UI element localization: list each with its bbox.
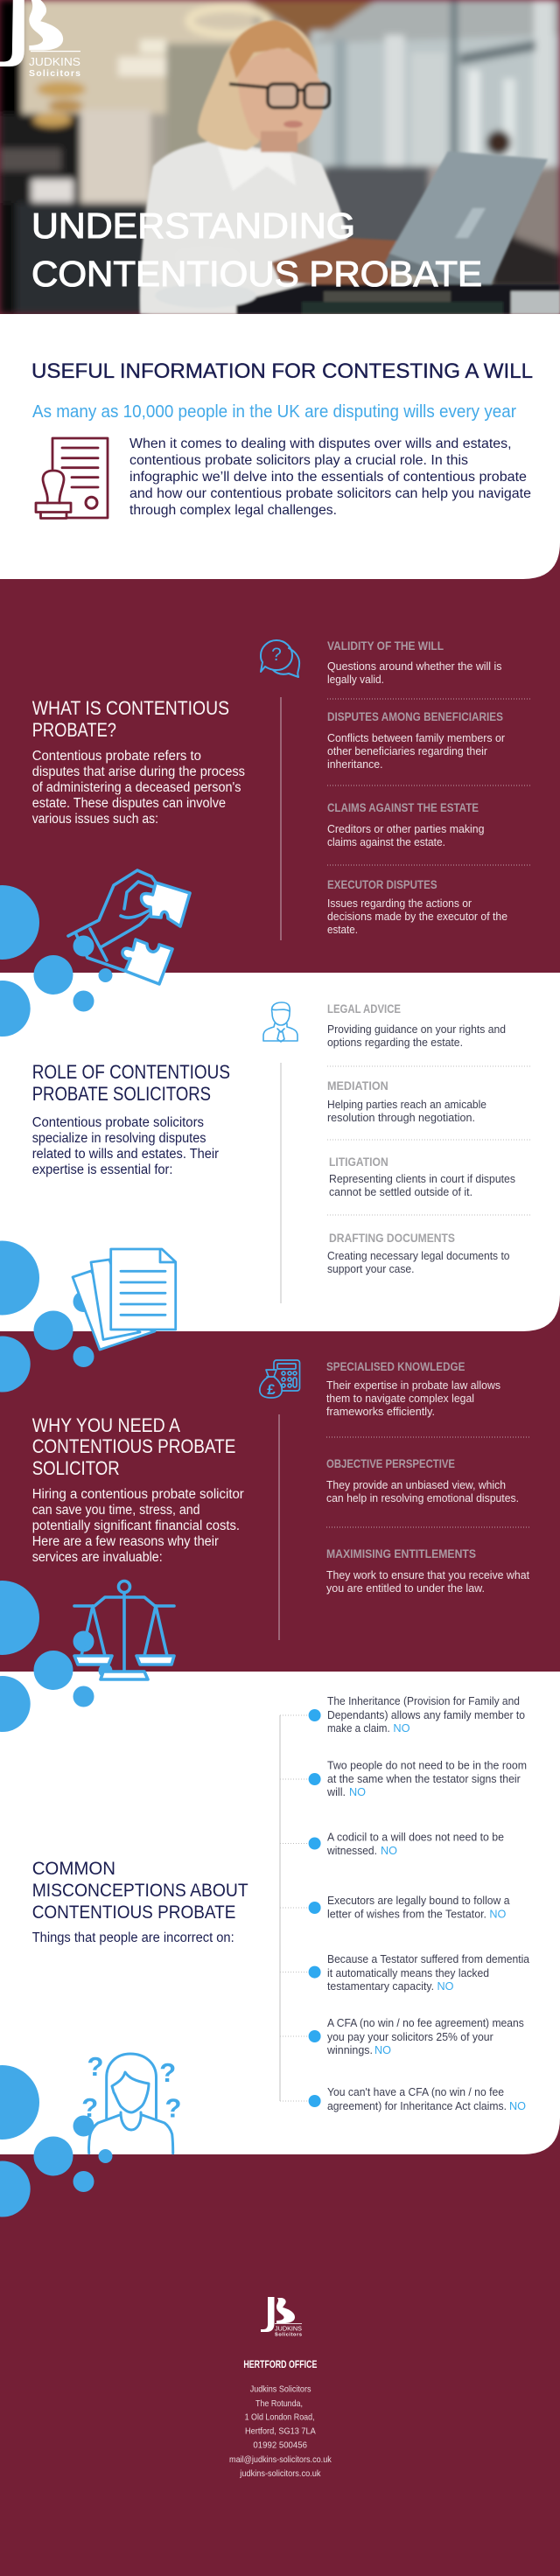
- item: validity of the will: VALIDITY OF THE WILL: [327, 639, 444, 653]
- misconception 6: you pay your solicitors 25% of your: [327, 2030, 494, 2043]
- item: objective perspective: can help in resolving emotional disputes.: [326, 1491, 519, 1504]
- title: [33, 213, 481, 287]
- office address: Judkins Solicitors: [250, 2384, 312, 2395]
- item: specialised knowledge: frameworks efficiently.: [326, 1405, 435, 1418]
- misconception 6: [280, 2016, 524, 2056]
- misconception 5: it automatically means they lacked: [327, 1966, 489, 1979]
- panel: footer office details: [229, 2297, 332, 2479]
- item: drafting documents: Creating necessary legal documents to: [327, 1249, 509, 1262]
- item: executor disputes: [327, 878, 508, 936]
- misconception 4: NO: [489, 1907, 506, 1921]
- misconception 1: NO: [393, 1721, 410, 1735]
- item: legal advice: options regarding the estate.: [327, 1036, 463, 1049]
- item: maximising entitlements: They work to ensure that you receive what: [326, 1568, 529, 1581]
- item: disputes among beneficiaries: Conflicts between family members or: [327, 731, 506, 744]
- heading: PROBATE?: [32, 719, 116, 741]
- item: claims against the estate: claims against the estate.: [327, 835, 445, 848]
- item: legal advice: Providing guidance on your rights and: [327, 1023, 506, 1036]
- misconception 3: [280, 1831, 504, 1857]
- panel: why you need a contentious probate solicitor: [32, 1360, 531, 1640]
- item: claims against the estate: Creditors or other parties making: [327, 822, 485, 835]
- misconception 7: [280, 2085, 526, 2112]
- icon: confused woman with question marks: ?: [159, 2057, 176, 2088]
- heading: [32, 697, 229, 741]
- decorative circles: third section boundary: [0, 1581, 112, 1732]
- heading: CONTENTIOUS PROBATE: [32, 1435, 235, 1457]
- misconception 1: make a claim.: [327, 1721, 390, 1735]
- intro paragraph: through complex legal challenges.: [130, 503, 337, 518]
- item: disputes among beneficiaries: [327, 710, 506, 771]
- item: claims against the estate: CLAIMS AGAINST THE ESTATE: [327, 801, 479, 814]
- item: specialised knowledge: Their expertise in probate law allows: [326, 1379, 500, 1392]
- heading: useful information: USEFUL INFORMATION FOR CONTESTING A WILL: [32, 360, 533, 383]
- description paragraph: disputes that arise during the process: [32, 764, 245, 779]
- panel: common misconceptions: [0, 1672, 560, 2154]
- icon: question speech bubbles: [261, 640, 299, 677]
- title: CONTENTIOUS PROBATE: [32, 254, 482, 294]
- misconception 5: [280, 1952, 530, 1993]
- icon: will document and stamp: [36, 438, 108, 518]
- office address: [229, 2384, 332, 2479]
- office address: mail@judkins-solicitors.co.uk: [229, 2454, 332, 2465]
- item: validity of the will: [327, 639, 502, 686]
- intro paragraph: infographic we’ll delve into the essentials of contentious probate: [130, 470, 527, 485]
- item: executor disputes: Issues regarding the actions or: [327, 897, 472, 910]
- item: litigation: cannot be settled outside of it.: [329, 1185, 472, 1198]
- description paragraph: of administering a deceased person's: [32, 780, 242, 795]
- icon: question speech bubbles: ?: [271, 645, 282, 665]
- description paragraph: various issues such as:: [32, 812, 158, 827]
- misconception 5: testamentary capacity.: [327, 1979, 434, 1993]
- heading: SOLICITOR: [32, 1457, 120, 1479]
- description paragraph: Contentious probate solicitors: [32, 1115, 204, 1130]
- heading: COMMON: [32, 1858, 116, 1879]
- item: disputes among beneficiaries: other beneficiaries regarding their: [327, 744, 488, 757]
- item: mediation: resolution through negotiation.: [327, 1111, 475, 1124]
- misconception 6: NO: [374, 2043, 391, 2056]
- item: litigation: Representing clients in court if disputes: [329, 1172, 515, 1185]
- title: UNDERSTANDING: [32, 206, 355, 246]
- misconception 6: winnings.: [326, 2043, 373, 2056]
- misconception 2: NO: [349, 1785, 366, 1798]
- heading: [32, 1858, 248, 1923]
- panel: introduction: [0, 314, 560, 579]
- item: maximising entitlements: you are entitled to under the law.: [326, 1581, 485, 1595]
- description line: Things that people are incorrect on:: [32, 1930, 234, 1945]
- description paragraph: related to wills and estates. Their: [32, 1147, 219, 1162]
- item: objective perspective: OBJECTIVE PERSPECTIVE: [326, 1457, 455, 1470]
- misconception 2: Two people do not need to be in the room: [327, 1758, 527, 1772]
- description paragraph: can save you time, stress, and: [32, 1503, 200, 1518]
- item: mediation: [327, 1079, 486, 1124]
- misconception 2: at the same when the testator signs their: [327, 1772, 521, 1785]
- intro paragraph: contentious probate solicitors play a crucial role. In this: [130, 453, 468, 468]
- misconception 4: [280, 1894, 510, 1921]
- misconception 3: NO: [381, 1844, 397, 1857]
- description paragraph: specialize in resolving disputes: [32, 1131, 206, 1146]
- logo: footer Judkins Solicitors: JUDKINS: [275, 2324, 302, 2332]
- misconception 4: Executors are legally bound to follow a: [327, 1894, 510, 1907]
- panel: role of contentious probate solicitors: [0, 973, 560, 1331]
- item: specialised knowledge: SPECIALISED KNOWLEDGE: [326, 1360, 465, 1373]
- icon: confused woman with question marks: ?: [165, 2093, 181, 2124]
- item: executor disputes: estate.: [327, 923, 358, 936]
- misconception 3: A codicil to a will does not need to be: [327, 1831, 504, 1844]
- hero photo: woman at laptop: [140, 20, 560, 314]
- icon: solicitor person: [263, 1002, 298, 1042]
- intro paragraph: and how our contentious probate solicitors can help you navigate: [130, 486, 531, 501]
- item: litigation: [329, 1155, 515, 1198]
- item: drafting documents: [327, 1232, 509, 1275]
- icon: confused woman with question marks: ?: [88, 2051, 103, 2082]
- item: legal advice: LEGAL ADVICE: [327, 1002, 401, 1016]
- icon: confused woman with question marks: [81, 2051, 181, 2154]
- description paragraph: services are invaluable:: [32, 1550, 163, 1565]
- office address: judkins-solicitors.co.uk: [239, 2468, 321, 2479]
- icon: calculator and money bag: [260, 1360, 299, 1398]
- icon: calculator and money bag: £: [267, 1381, 276, 1398]
- misconception 3: witnessed.: [326, 1844, 377, 1857]
- description paragraph: Hiring a contentious probate solicitor: [32, 1487, 244, 1502]
- item: executor disputes: decisions made by the executor of the: [327, 910, 508, 923]
- office address: 01992 500456: [253, 2440, 307, 2451]
- item: objective perspective: [326, 1457, 519, 1504]
- item: maximising entitlements: [326, 1547, 529, 1595]
- misconception 7: You can't have a CFA (no win / no fee: [327, 2085, 504, 2098]
- panel: hero photo banner: [0, 0, 560, 314]
- misconception 5: NO: [438, 1979, 453, 1993]
- misconception 4: letter of wishes from the Testator.: [327, 1907, 486, 1921]
- intro paragraph: [130, 436, 531, 518]
- misconception 2: [280, 1758, 527, 1798]
- item: executor disputes: EXECUTOR DISPUTES: [327, 878, 438, 891]
- item: validity of the will: Questions around whether the will is: [327, 660, 502, 673]
- heading: CONTENTIOUS PROBATE: [32, 1902, 235, 1923]
- description paragraph: estate. These disputes can involve: [32, 796, 226, 811]
- item: validity of the will: legally valid.: [327, 673, 384, 686]
- heading: [32, 1414, 235, 1479]
- intro paragraph: When it comes to dealing with disputes over wills and estates,: [130, 436, 511, 451]
- item: objective perspective: They provide an unbiased view, which: [326, 1478, 506, 1491]
- heading: MISCONCEPTIONS ABOUT: [32, 1880, 248, 1901]
- misconception 7: agreement) for Inheritance Act claims.: [327, 2099, 507, 2112]
- item: claims against the estate: [327, 801, 485, 848]
- item: drafting documents: DRAFTING DOCUMENTS: [329, 1232, 455, 1245]
- decorative circles: first section boundary: [0, 885, 112, 1037]
- description paragraph: expertise is essential for:: [32, 1162, 173, 1177]
- statistic subheading: As many as 10,000 people in the UK are disputing wills every year: [32, 401, 516, 422]
- item: maximising entitlements: MAXIMISING ENTITLEMENTS: [326, 1547, 476, 1560]
- office address: The Rotunda,: [256, 2398, 303, 2409]
- item: drafting documents: support your case.: [327, 1262, 415, 1275]
- misconception 1: Dependants) allows any family member to: [327, 1708, 525, 1721]
- misconception 5: Because a Testator suffered from dementia: [327, 1952, 530, 1965]
- misconception 2: will.: [326, 1785, 346, 1798]
- heading: WHAT IS CONTENTIOUS: [32, 697, 229, 719]
- item: disputes among beneficiaries: DISPUTES AMONG BENEFICIARIES: [327, 710, 503, 723]
- description paragraph: Here are a few reasons why their: [32, 1534, 219, 1549]
- item: legal advice: [327, 1002, 506, 1049]
- heading: [32, 1061, 230, 1105]
- heading: ROLE OF CONTENTIOUS: [32, 1061, 230, 1083]
- description paragraph: [32, 1115, 219, 1177]
- panel: what is contentious probate: [32, 639, 531, 940]
- misconception 1: [280, 1694, 525, 1735]
- description paragraph: [32, 749, 245, 827]
- logo: Judkins Solicitors: JUDKINS: [29, 55, 80, 68]
- heading: PROBATE SOLICITORS: [32, 1083, 211, 1105]
- logo: footer Judkins Solicitors: [261, 2297, 302, 2338]
- logo: Judkins Solicitors: Solicitors: [29, 68, 80, 79]
- description paragraph: [32, 1487, 244, 1565]
- item: mediation: MEDIATION: [327, 1079, 388, 1093]
- item: specialised knowledge: [326, 1360, 500, 1418]
- decorative circles: second section boundary: [0, 1240, 112, 1393]
- office address: Hertford, SG13 7LA: [245, 2426, 316, 2437]
- decorative circles: fourth section boundary: [0, 2065, 112, 2216]
- icon: confused woman with question marks: ?: [81, 2092, 98, 2123]
- icon: stack of documents: [73, 1249, 176, 1350]
- icon: scales of justice: [74, 1581, 174, 1679]
- office address: 1 Old London Road,: [245, 2412, 315, 2423]
- icon: hands holding puzzle pieces: [68, 870, 190, 984]
- misconception 1: The Inheritance (Provision for Family and: [327, 1694, 520, 1707]
- office heading: HERTFORD OFFICE: [243, 2360, 318, 2370]
- logo: Judkins Solicitors: [0, 0, 80, 79]
- description paragraph: potentially significant financial costs.: [32, 1518, 240, 1533]
- heading: WHY YOU NEED A: [32, 1414, 180, 1436]
- description paragraph: Contentious probate refers to: [32, 749, 201, 764]
- item: mediation: Helping parties reach an amicable: [327, 1098, 486, 1111]
- logo: footer Judkins Solicitors: Solicitors: [275, 2333, 302, 2338]
- item: disputes among beneficiaries: inheritance.: [327, 757, 383, 771]
- hero photo: blurred office background: [0, 0, 560, 314]
- misconception 6: A CFA (no win / no fee agreement) means: [327, 2016, 524, 2029]
- item: litigation: LITIGATION: [329, 1155, 388, 1169]
- misconception 7: NO: [509, 2099, 526, 2112]
- item: specialised knowledge: them to navigate complex legal: [326, 1392, 474, 1405]
